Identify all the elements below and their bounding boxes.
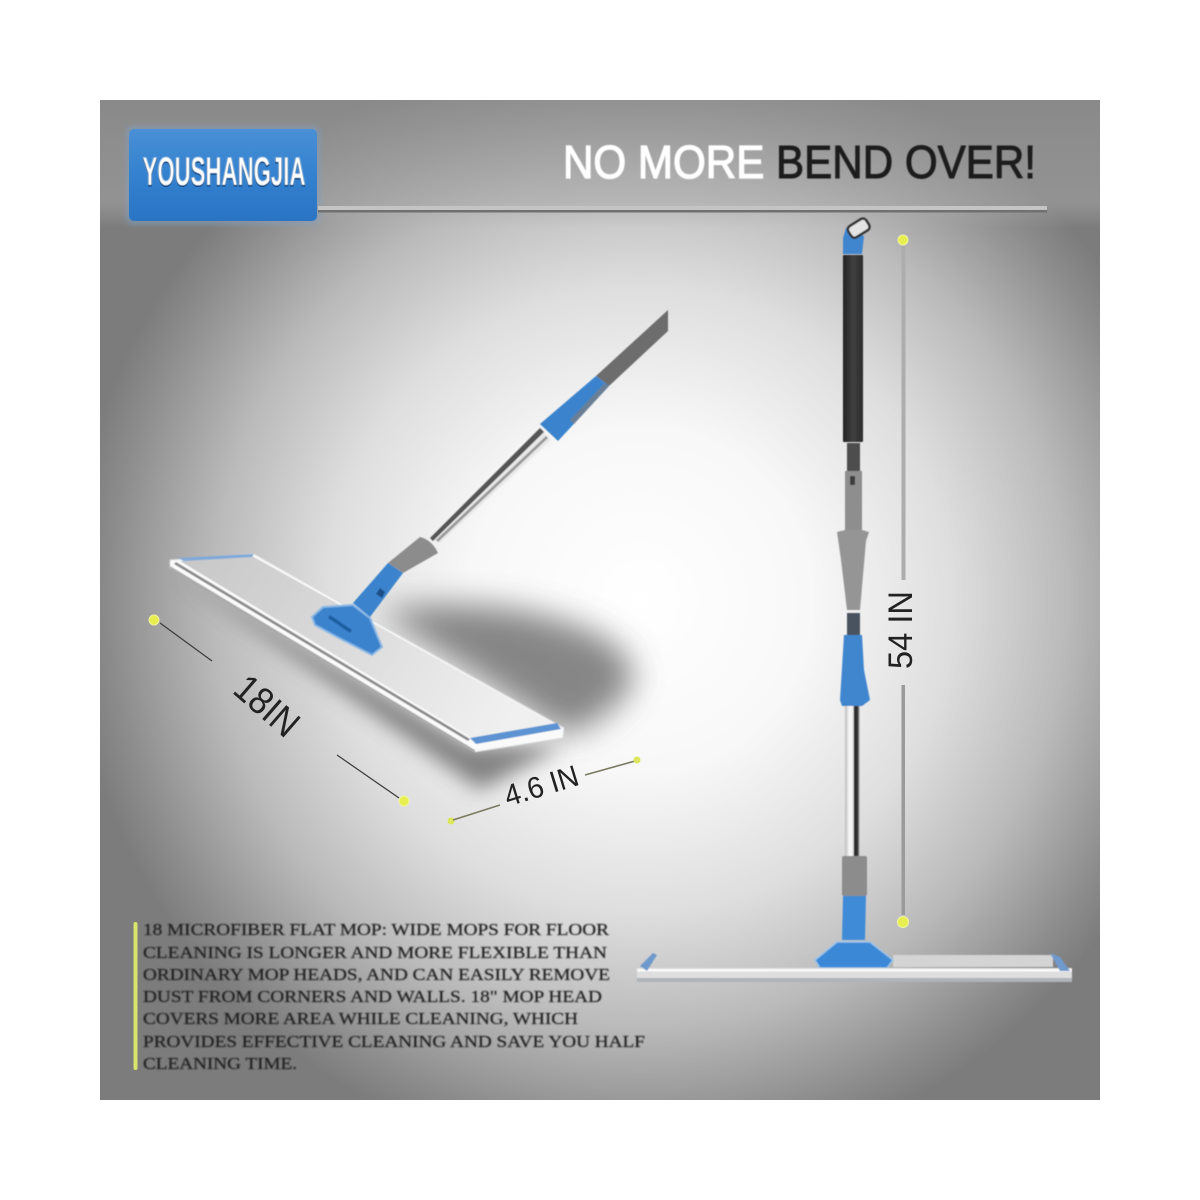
logo badge: YOUSHANGJIA: YOUSHANGJIA: [142, 150, 306, 194]
blue base foot: [815, 942, 893, 968]
handle blue neck: [353, 563, 403, 617]
description text: DUST FROM CORNERS AND WALLS. 18" MOP HEAD: [143, 987, 602, 1006]
mop head inner tray: [180, 556, 558, 738]
description accent bar: [134, 922, 138, 1070]
illustration: upright mop: [637, 217, 1072, 982]
blue pad strip near end: [470, 723, 561, 744]
dark upper tube: [847, 443, 860, 471]
description text: ORDINARY MOP HEADS, AND CAN EASILY REMOVE: [143, 965, 610, 984]
black foam grip: [843, 255, 863, 442]
dimension: 54 IN height: [882, 235, 920, 928]
mop head lower edge: [170, 566, 475, 753]
dimension: 4.6 IN width: [448, 756, 640, 824]
blue lower neck: [842, 896, 866, 940]
dimension: 54 IN height: 54 IN: [882, 591, 920, 669]
grey lower joint: [842, 856, 867, 896]
handle grey joint: [388, 537, 438, 573]
handle steel tube: [430, 428, 551, 543]
hanging hook: [843, 217, 871, 254]
steel lower tube: [845, 706, 860, 856]
logo badge: YOUSHANGJIA: YOUSHANGJIA: [142, 151, 306, 195]
blue clip: [840, 635, 870, 706]
handle grey grip: [596, 310, 668, 386]
description text: PROVIDES EFFECTIVE CLEANING AND SAVE YOU HALF: [143, 1032, 645, 1051]
dark mid tube: [847, 613, 860, 636]
panel: grey spotlight background: [100, 100, 1100, 1100]
handle blue collar: [540, 376, 609, 441]
floor shadow of angled mop: [175, 572, 633, 790]
divider under heading: [318, 206, 1047, 212]
description text: COVERS MORE AREA WHILE CLEANING, WHICH: [143, 1009, 578, 1028]
illustration: angled flat mop: [170, 310, 668, 753]
description text: 18 MICROFIBER FLAT MOP: WIDE MOPS FOR FLOOR: [143, 920, 610, 939]
upper tray right side: [893, 955, 1053, 967]
grey sleeve: [845, 471, 862, 531]
dimension: 4.6 IN width: 4.6 IN: [500, 760, 583, 813]
description text: CLEANING IS LONGER AND MORE FLEXIBLE THAN: [143, 943, 607, 962]
description text: [143, 920, 645, 1073]
mop head front edge line: [174, 562, 470, 741]
blue pad strip far end: [178, 554, 254, 561]
flat mop head: [637, 968, 1072, 982]
mop head pad: [170, 554, 564, 752]
description text: CLEANING TIME.: [143, 1054, 297, 1073]
heading: NO MORE BEND OVER!: [563, 136, 1036, 188]
dimension: 18IN length: [149, 615, 409, 806]
grey flared section: [837, 530, 869, 610]
logo badge: YOUSHANGJIA: [126, 126, 320, 224]
blue pad end right: [1050, 953, 1070, 971]
mop blue swivel foot: [312, 605, 382, 655]
dimension: 18IN length: 18IN: [225, 667, 307, 746]
blue pad end left: [640, 953, 657, 971]
